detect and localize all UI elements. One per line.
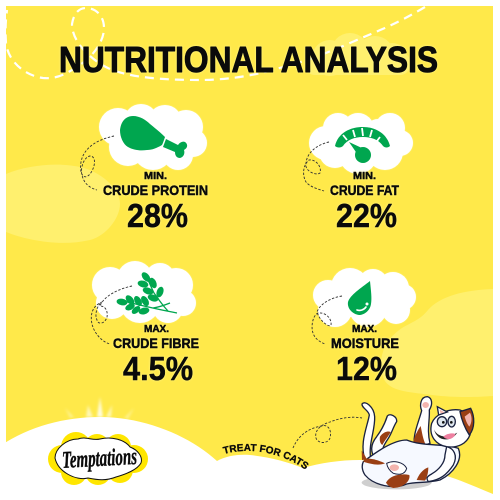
label: moisture: MOISTURE (331, 335, 399, 351)
mouth and tongue (434, 429, 457, 439)
panel: crude protein (81, 104, 208, 234)
logo wordmark: Temptations (61, 444, 138, 474)
icon: chicken drumstick (120, 116, 187, 158)
label: crude fat: CRUDE FAT (330, 182, 399, 198)
raised arm (414, 397, 432, 448)
label: crude fibre: CRUDE FIBRE (113, 335, 199, 351)
logo cloud white (55, 438, 141, 480)
right ear and brown patch (460, 408, 474, 435)
icon: water drop (348, 281, 371, 315)
logo cloud yellow border (48, 432, 148, 485)
logo: Temptations (48, 432, 148, 485)
title: NUTRITIONAL ANALYSIS (59, 39, 438, 80)
label: crude protein: CRUDE PROTEIN (103, 182, 208, 198)
dotted trail: cat (293, 417, 362, 448)
dotted trail (91, 286, 132, 344)
illustration: cat (362, 397, 474, 489)
label: max: MAX. (352, 323, 377, 335)
front arm (427, 447, 455, 482)
panel: moisture (312, 268, 416, 387)
treat for cats label: TREAT FOR CATS (222, 444, 308, 469)
pale cloud: top right (305, 33, 410, 76)
glow rays above the white hill (65, 397, 134, 419)
value: 28%: 28% (127, 197, 188, 234)
body (362, 440, 460, 487)
pale cloud: middle left (6, 165, 120, 243)
dotted trail (81, 136, 114, 190)
icon: gauge (335, 127, 390, 163)
left ear (437, 407, 447, 415)
white dashed flight path (6, 7, 425, 80)
eyes (437, 417, 447, 427)
icon: leafy sprig (116, 271, 177, 316)
label: min: MIN. (144, 170, 167, 182)
panel: crude fat (304, 113, 413, 234)
cloud: fibre (92, 261, 196, 323)
cloud: moisture (313, 268, 416, 327)
head (431, 410, 471, 447)
cloud: fat (309, 113, 413, 174)
pale cloud: lower right (381, 289, 493, 397)
back leg (372, 415, 397, 460)
panel: crude fibre (91, 261, 199, 387)
value: 22%: 22% (336, 197, 397, 234)
dotted trail (304, 142, 329, 191)
cloud: protein (99, 104, 207, 170)
value: 12%: 12% (336, 350, 397, 387)
label: max: MAX. (144, 323, 169, 335)
label: min: MIN. (353, 170, 376, 182)
value: 4.5%: 4.5% (123, 350, 193, 387)
white hill footer (0, 417, 500, 500)
dotted trail (312, 296, 342, 344)
tail (362, 403, 375, 460)
